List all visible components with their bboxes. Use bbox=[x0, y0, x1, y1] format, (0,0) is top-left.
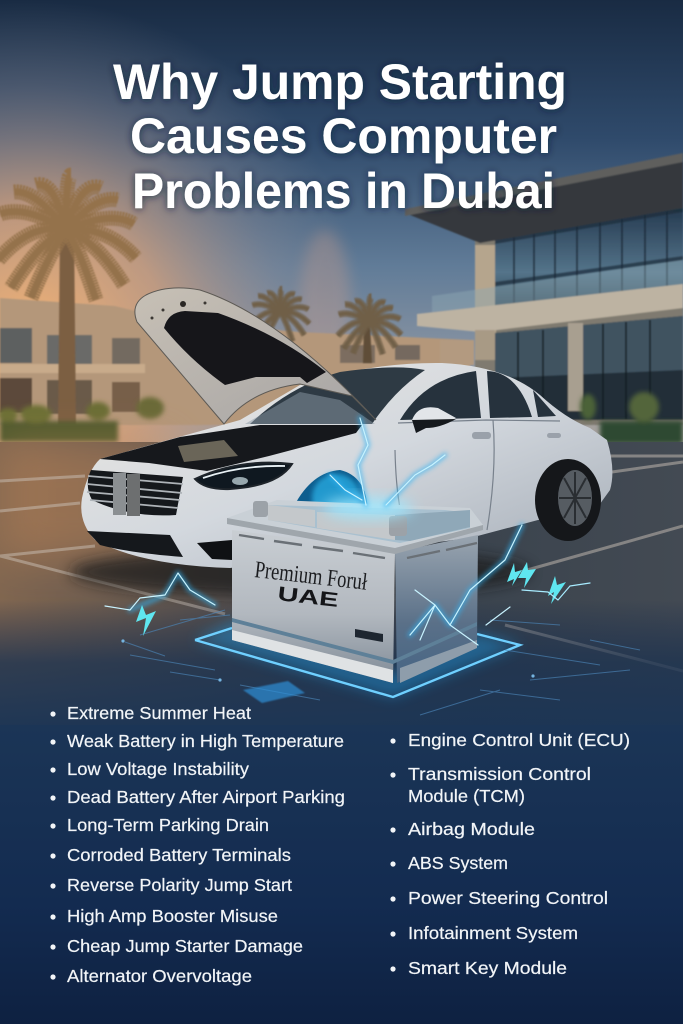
windshield bbox=[250, 367, 425, 424]
glow on battery top bbox=[323, 497, 413, 519]
battery label: Premium Foruł bbox=[253, 557, 369, 596]
list: affected modules: ABS System bbox=[408, 853, 508, 873]
list: causes: Reverse Polarity Jump Start bbox=[67, 875, 292, 895]
list: causes: Corroded Battery Terminals bbox=[67, 845, 291, 865]
list: affected modules: Module (TCM) bbox=[408, 786, 525, 806]
lower intakes bbox=[87, 531, 183, 557]
list: causes: High Amp Booster Misuse bbox=[67, 906, 278, 926]
list: causes: Weak Battery in High Temperature bbox=[67, 731, 344, 751]
title: Causes Computer bbox=[130, 108, 557, 164]
list: causes: Cheap Jump Starter Damage bbox=[67, 936, 303, 956]
side mirror bbox=[412, 407, 456, 432]
title: Problems in Dubai bbox=[132, 163, 555, 219]
list: affected modules: Transmission Control bbox=[408, 764, 591, 784]
battery front face bbox=[232, 530, 395, 683]
list: causes: Dead Battery After Airport Parking bbox=[67, 787, 345, 807]
hedges and shrubs bbox=[0, 392, 683, 444]
glowing circuit board on ground bbox=[121, 610, 640, 715]
list: affected modules bbox=[390, 730, 630, 978]
left background building bbox=[0, 298, 474, 425]
list: causes bbox=[50, 703, 345, 986]
battery terminals bbox=[253, 501, 407, 536]
car bbox=[70, 288, 612, 596]
headlight bbox=[195, 463, 292, 489]
list: causes: Alternator Overvoltage bbox=[67, 966, 252, 986]
grille bbox=[87, 470, 183, 516]
battery top bbox=[227, 500, 483, 552]
icon: small palm trees bbox=[251, 289, 401, 363]
rear wheel bbox=[535, 459, 601, 541]
battery label UAE: UAE bbox=[276, 583, 340, 612]
side windows bbox=[400, 371, 556, 420]
car lightning glow bbox=[130, 418, 522, 635]
list: affected modules: Smart Key Module bbox=[408, 958, 567, 978]
small bolt icons bbox=[136, 562, 566, 636]
engine bay bbox=[100, 425, 362, 471]
battery side face bbox=[395, 535, 478, 683]
list: affected modules: Power Steering Control bbox=[408, 888, 608, 908]
door lines and handles bbox=[395, 420, 560, 530]
battery vents bbox=[239, 535, 477, 558]
title: Why Jump Starting bbox=[113, 54, 567, 110]
list: causes: Long-Term Parking Drain bbox=[67, 815, 269, 835]
battery bbox=[227, 500, 483, 683]
ground: parking lot bbox=[0, 440, 683, 740]
car roof and body bbox=[81, 363, 612, 568]
right modern building bbox=[405, 153, 683, 425]
open hood bbox=[135, 288, 376, 424]
front wheel arch with blue glow bbox=[294, 470, 368, 510]
list: affected modules: Infotainment System bbox=[408, 923, 578, 943]
list: affected modules: Engine Control Unit (ECU) bbox=[408, 730, 630, 750]
bottom panel background bbox=[0, 725, 683, 1024]
background: dusk sky bbox=[0, 0, 683, 460]
title bbox=[113, 54, 567, 219]
list: affected modules: Airbag Module bbox=[408, 819, 535, 839]
car lightning core bbox=[105, 418, 522, 645]
serial badge bbox=[355, 629, 383, 642]
battery base strip bbox=[232, 630, 393, 683]
list: causes: Extreme Summer Heat bbox=[67, 703, 251, 723]
list: causes: Low Voltage Instability bbox=[67, 759, 249, 779]
icon: large palm tree bbox=[0, 175, 136, 425]
lightning bolts bbox=[105, 418, 590, 645]
car shadow bbox=[70, 548, 530, 596]
